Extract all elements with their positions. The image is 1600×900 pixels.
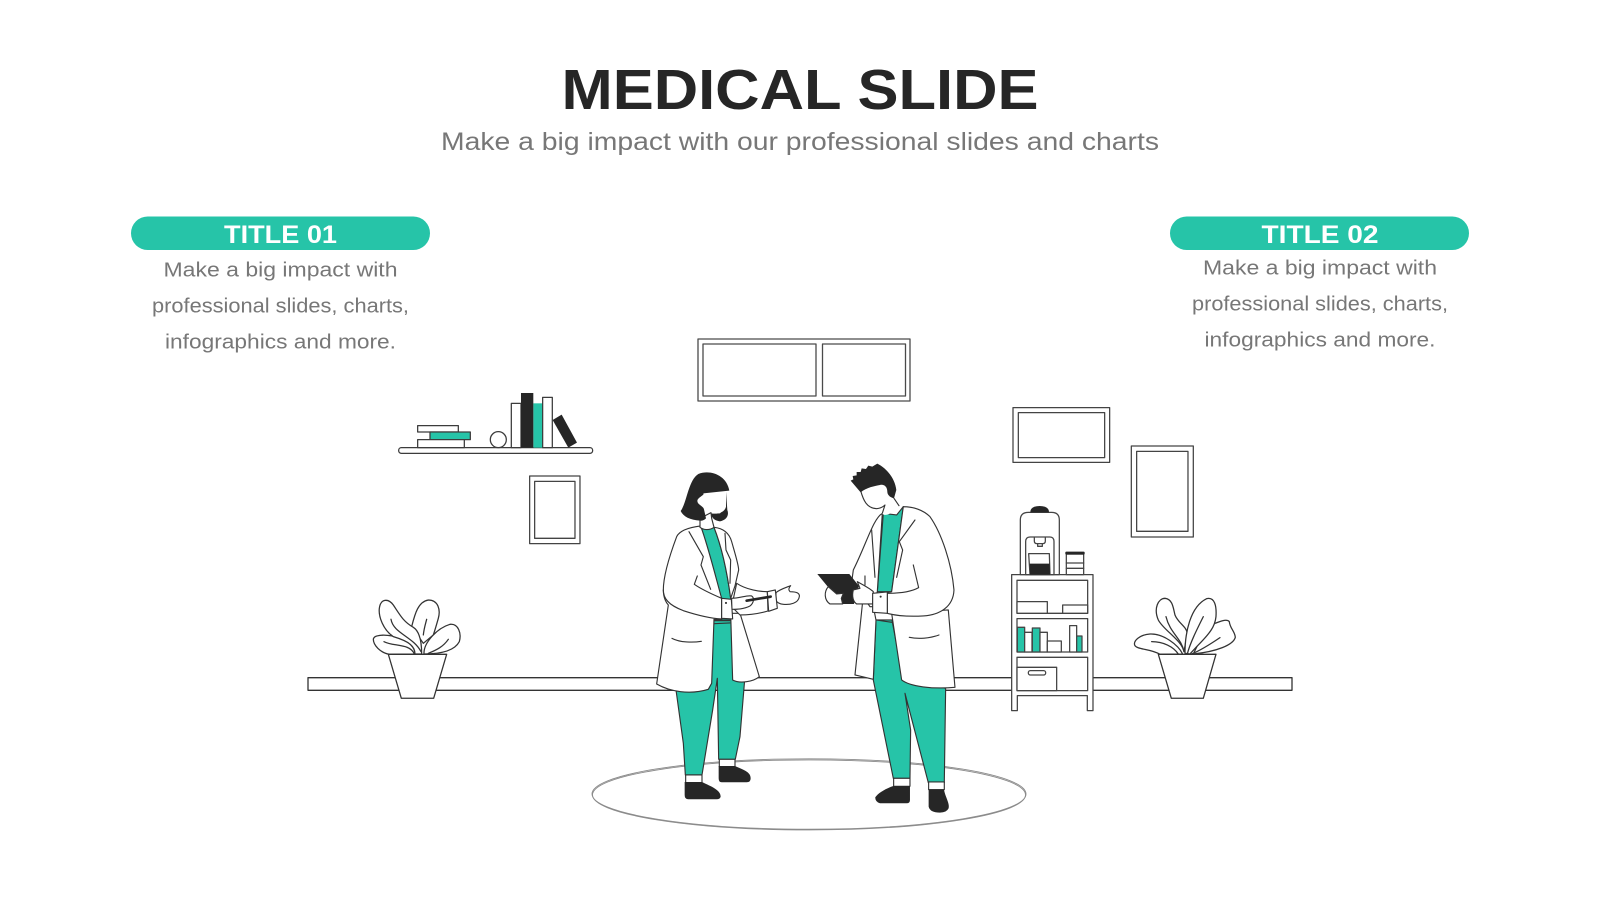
text block: title 01 body: infographics and more. bbox=[165, 332, 396, 354]
neck bbox=[700, 513, 714, 530]
face bbox=[703, 491, 726, 514]
plant right bbox=[1134, 598, 1235, 698]
title: MEDICAL SLIDE bbox=[562, 58, 1038, 122]
extended arm and hand bbox=[732, 583, 799, 615]
right coat panel bbox=[731, 613, 759, 682]
hands bbox=[825, 582, 887, 613]
hair bbox=[851, 464, 896, 498]
shoes and cuffs bbox=[685, 759, 751, 799]
picture frames right bbox=[1013, 408, 1193, 537]
subtitle: Make a big impact with our professional slides and charts bbox=[441, 128, 1159, 156]
text block: title 02 body: professional slides, charts, bbox=[1192, 294, 1448, 316]
heading: title 01: TITLE 01 bbox=[224, 221, 337, 249]
text block: title 01 body: professional slides, charts, bbox=[152, 296, 409, 318]
shoes and cuffs bbox=[875, 778, 949, 813]
trousers bbox=[873, 620, 946, 783]
figure: male doctor bbox=[817, 464, 955, 813]
figure: female doctor bbox=[657, 472, 799, 799]
face outline bbox=[861, 491, 899, 513]
tablet bbox=[817, 574, 859, 604]
pill: title 02 bbox=[1170, 216, 1469, 250]
coat details bbox=[865, 520, 939, 638]
text block: title 01 body: Make a big impact with bbox=[164, 260, 398, 282]
cabinet with coffee machine bbox=[1012, 506, 1093, 711]
illustration: medical office scene bbox=[308, 339, 1292, 830]
cuff and hand bbox=[722, 596, 753, 619]
picture frame left bbox=[530, 476, 580, 544]
lower coat bbox=[855, 602, 955, 688]
panel: title 02 bbox=[1170, 216, 1469, 352]
pen bbox=[747, 597, 771, 601]
heading: title 02: TITLE 02 bbox=[1262, 221, 1378, 249]
text block: title 01 body bbox=[152, 260, 409, 354]
upper right coat and sleeve bbox=[887, 507, 954, 616]
shirt bbox=[877, 507, 903, 592]
shirt bbox=[701, 527, 731, 621]
text block: title 02 body: Make a big impact with bbox=[1203, 258, 1437, 280]
text block: title 02 body: infographics and more. bbox=[1204, 330, 1436, 352]
wall shelf with books bbox=[399, 393, 593, 453]
coat fold lines and pocket bbox=[663, 532, 731, 642]
panel: title 01 bbox=[131, 216, 430, 354]
window bbox=[698, 339, 910, 401]
trousers bbox=[676, 620, 745, 775]
hair back bbox=[711, 492, 728, 521]
floor ellipse bbox=[592, 759, 1026, 830]
coat left side bbox=[657, 526, 722, 692]
pill: title 01 bbox=[131, 216, 430, 250]
plant left bbox=[373, 600, 460, 698]
neck and face bbox=[861, 485, 898, 515]
coat right lapel bbox=[714, 527, 739, 598]
hair front bbox=[681, 472, 729, 521]
upper left coat bbox=[852, 513, 882, 607]
wall rail bbox=[308, 678, 1292, 690]
text block: title 02 body bbox=[1192, 258, 1448, 352]
